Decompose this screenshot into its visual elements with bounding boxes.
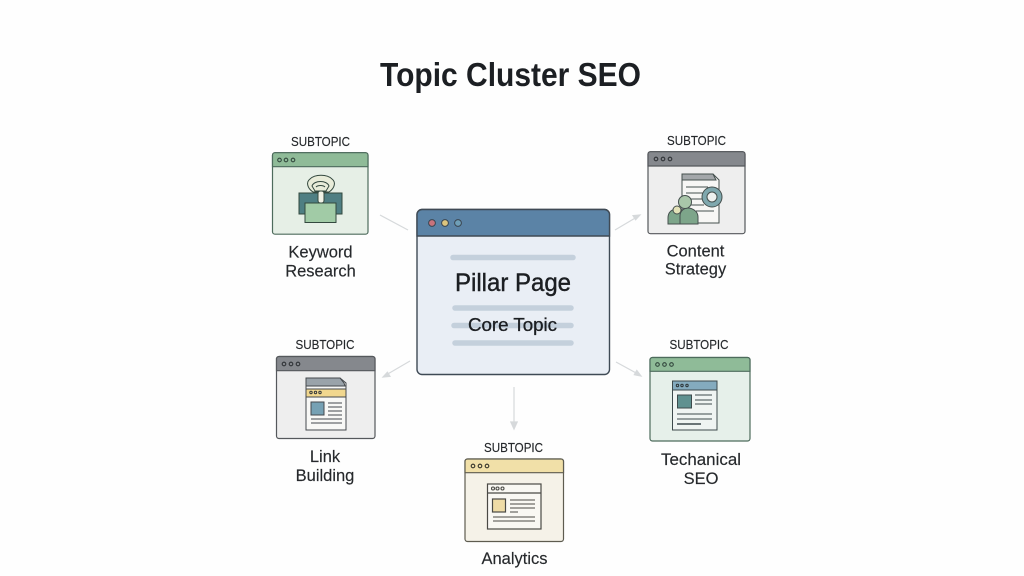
panel: technical seo [650,338,750,488]
window [276,356,375,438]
icon: web page layout [672,381,717,430]
arrow: pillar to link building [383,361,410,377]
eyebrow: SUBTOPIC [670,338,728,352]
arrow: keyword research to pillar [380,215,408,230]
icon: document, gear and people [668,174,722,224]
label [661,451,741,488]
panel: link building [276,338,375,485]
window [465,459,564,542]
label: Research [285,262,356,280]
icon: report page [488,484,541,529]
pillar window body [417,210,610,374]
eyebrow: SUBTOPIC [667,134,726,148]
eyebrow: SUBTOPIC [484,441,543,455]
eyebrow: SUBTOPIC [291,135,350,149]
arrow: pillar to analytics [511,387,517,429]
label: Keyword [288,244,353,262]
window [272,153,368,234]
placeholder text lines [453,258,573,343]
window [648,152,745,234]
pillar window header [417,210,610,236]
label: Content [667,242,725,260]
panel: pillar page [417,210,610,374]
label: Link [310,448,341,466]
label: SEO [684,470,719,488]
panel: keyword research [272,135,368,280]
eyebrow: SUBTOPIC [296,338,354,352]
label: Techanical [661,451,741,469]
panel: content strategy [648,134,745,278]
label [296,448,354,485]
arrow: pillar to content strategy [615,215,640,230]
label [665,242,727,278]
label: Strategy [665,260,727,278]
arrow: pillar to technical seo [616,362,641,376]
window [650,358,750,441]
title: Topic Cluster SEO [380,56,641,93]
icon: document page [306,378,346,430]
label: Building [296,467,354,485]
pillar heading: Pillar Page [455,269,571,297]
panel: analytics [465,441,564,568]
label: Analytics [481,550,548,568]
pillar subheading: Core Topic [468,315,557,335]
label [285,244,356,280]
icon: keyword signal over screens [299,175,342,222]
